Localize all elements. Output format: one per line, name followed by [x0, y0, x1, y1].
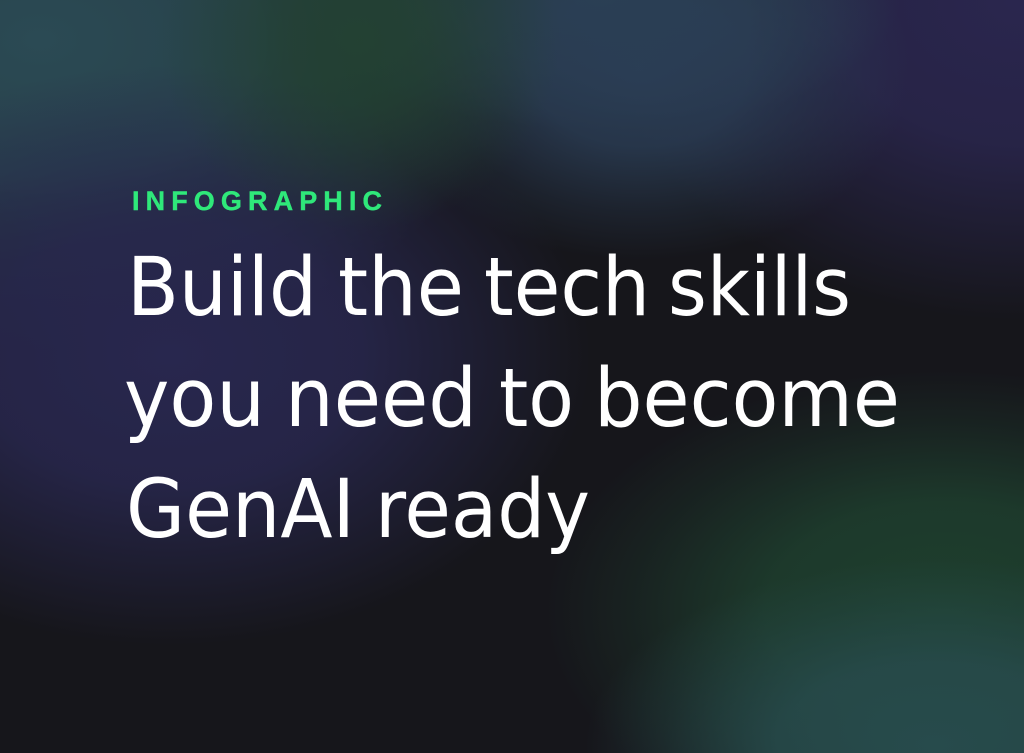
title line 3: ready	[375, 463, 590, 557]
title line 2: to	[499, 352, 574, 446]
title line 1: skills	[668, 241, 851, 335]
title line 2: need	[285, 352, 477, 446]
title line 1: Build	[127, 241, 317, 335]
title line 1: tech	[484, 241, 650, 335]
title line 2	[124, 352, 900, 446]
title line 1	[127, 241, 851, 335]
title line 1: the	[338, 241, 464, 335]
title line 2: you	[124, 352, 265, 446]
title line 2: become	[594, 352, 900, 446]
title line 3: GenAI	[126, 463, 355, 557]
title line 3	[126, 463, 590, 557]
eyebrow label: INFOGRAPHIC	[132, 186, 382, 216]
title	[124, 241, 900, 557]
